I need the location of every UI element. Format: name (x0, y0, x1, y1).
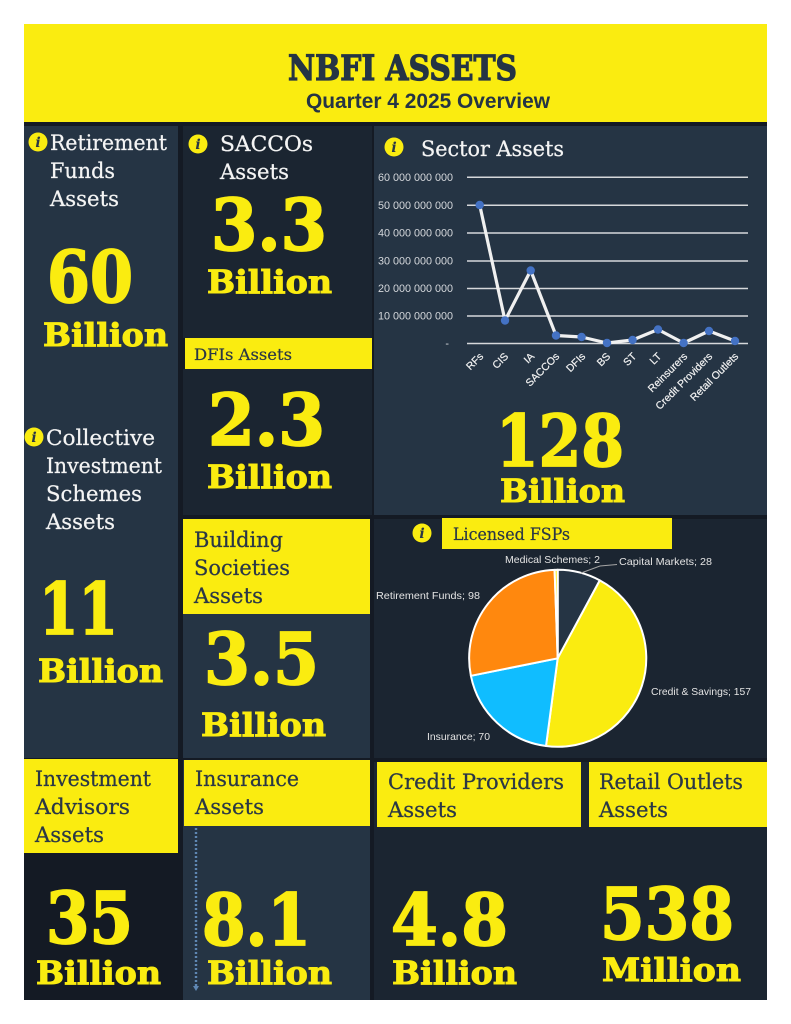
line chart: sector assets: 30 000 000 000 (378, 256, 453, 268)
heading: building societies assets (183, 519, 370, 614)
line chart: sector assets: Retail Outlets (688, 351, 741, 404)
value: 60 billion: 60 (47, 235, 133, 319)
value: 3.5 billion (201, 617, 326, 744)
value: 8.1 billion: Billion (207, 954, 332, 992)
heading: retirement funds assets (49, 131, 168, 211)
line chart: sector assets: LT (648, 350, 665, 367)
value: 2.3 billion: Billion (207, 458, 332, 496)
value: 60 billion: Billion (43, 316, 168, 354)
value: 11 billion: 11 (39, 567, 118, 651)
heading: insurance assets: Insurance (195, 767, 299, 791)
value: 538 million: Million (602, 951, 741, 989)
icon: info retirement funds: i (35, 135, 41, 151)
title: NBFI ASSETS (288, 48, 517, 89)
pie chart: licensed fsps: Capital Markets; 28 (619, 556, 712, 568)
heading: investment advisors assets: Assets (34, 823, 104, 847)
value: 35 billion (36, 876, 161, 992)
panel: saccos assets (183, 126, 372, 338)
value: 538 million (600, 872, 741, 989)
value: 11 billion: Billion (38, 652, 163, 690)
line chart: sector assets: BS (595, 351, 613, 369)
heading: insurance assets: Assets (194, 795, 264, 819)
line chart: sector assets (378, 172, 748, 412)
line chart: sector assets: 20 000 000 000 (378, 283, 453, 295)
value: 128 billion (496, 399, 625, 510)
icon: info collective investment (24, 428, 44, 446)
value: 11 billion (38, 567, 163, 690)
heading: investment advisors assets (24, 759, 178, 853)
value: 60 billion (43, 235, 168, 354)
value: 3.5 billion: Billion (201, 706, 326, 744)
icon: info saccos: i (195, 137, 201, 153)
heading: investment advisors assets: Investment (35, 767, 152, 791)
value: 4.8 billion: 4.8 (391, 878, 508, 962)
icon: info saccos (188, 134, 208, 154)
heading: retail outlets assets: Assets (598, 798, 668, 822)
header banner (24, 24, 767, 122)
value: 3.3 billion: 3.3 (211, 183, 327, 267)
heading: building societies assets: Assets (193, 584, 263, 608)
value: 35 billion: 35 (46, 876, 133, 960)
heading: retirement funds assets: Retirement (50, 131, 168, 155)
heading: licensed fsps: Licensed FSPs (453, 525, 570, 545)
value: 2.3 billion: 2.3 (208, 378, 325, 462)
heading: retail outlets assets (589, 762, 767, 827)
pie chart: licensed fsps: Medical Schemes; 2 (505, 554, 600, 566)
heading: collective investment schemes assets: Schemes (46, 482, 142, 506)
heading: sector assets: Sector Assets (421, 137, 564, 161)
panel: building societies assets (183, 519, 370, 758)
line chart: sector assets: RFs (464, 351, 486, 373)
panel: insurance assets (183, 760, 370, 1000)
line chart: sector assets: Credit Providers (653, 351, 715, 412)
line chart: sector assets: 60 000 000 000 (378, 172, 453, 184)
heading: insurance assets (184, 760, 370, 826)
line chart: sector assets: - (445, 338, 449, 350)
icon: info licensed fsps (412, 524, 432, 542)
value: 128 billion: 128 (496, 399, 624, 483)
pie chart: licensed fsps: Insurance; 70 (427, 731, 490, 743)
line chart: sector assets: IA (522, 351, 537, 366)
heading: retail outlets assets: Retail Outlets (599, 770, 743, 794)
heading: collective investment schemes assets: Investment (46, 454, 163, 478)
value: 35 billion: Billion (36, 954, 161, 992)
heading: collective investment schemes assets: Collective (46, 426, 155, 450)
value: 128 billion: Billion (500, 472, 625, 510)
heading: saccos assets (219, 132, 313, 184)
heading: retirement funds assets: Assets (49, 187, 119, 211)
heading: licensed fsps (442, 518, 672, 549)
value: 3.3 billion (207, 183, 332, 301)
heading: investment advisors assets: Advisors (34, 795, 130, 819)
heading: dfis assets (185, 338, 372, 369)
subtitle: Quarter 4 2025 Overview (306, 90, 551, 113)
panel: sector assets (374, 126, 767, 515)
heading: building societies assets: Societies (194, 556, 290, 580)
heading: retirement funds assets: Funds (50, 159, 115, 183)
value: 538 million: 538 (600, 872, 734, 956)
line chart: sector assets: 50 000 000 000 (378, 200, 453, 212)
heading: collective investment schemes assets (45, 426, 163, 534)
line chart: sector assets: DFIs (564, 351, 588, 375)
line chart: sector assets: 40 000 000 000 (378, 228, 453, 240)
heading: credit providers assets: Assets (387, 798, 457, 822)
panel: dfis assets (183, 338, 372, 515)
panel: investment advisors assets (24, 759, 178, 1000)
line chart: sector assets: Reinsurers (646, 351, 690, 395)
icon: info sector assets: i (391, 140, 397, 156)
panel: retirement funds and collective investment schemes (24, 126, 178, 758)
icon: info retirement funds (28, 132, 48, 152)
icon: info collective investment: i (31, 430, 37, 446)
value: 8.1 billion: 8.1 (202, 878, 311, 962)
pie chart: licensed fsps: Credit & Savings; 157 (651, 686, 751, 698)
line chart: sector assets: CIS (490, 351, 511, 372)
heading: saccos assets: Assets (219, 160, 289, 184)
line chart: sector assets: ST (621, 350, 640, 369)
heading: saccos assets: SACCOs (220, 132, 313, 156)
heading: credit providers assets (377, 762, 581, 827)
icon: info licensed fsps: i (419, 526, 425, 542)
value: 3.5 billion: 3.5 (204, 617, 319, 701)
heading: credit providers assets: Credit Providers (388, 770, 564, 794)
line chart: sector assets: 10 000 000 000 (378, 310, 453, 322)
line chart: sector assets: SACCOs (524, 351, 562, 389)
panel: credit providers and retail outlets (374, 762, 767, 1000)
icon: info sector assets (384, 138, 404, 156)
heading: collective investment schemes assets: Assets (45, 510, 115, 534)
value: 4.8 billion: Billion (392, 954, 517, 992)
arrow: dotted down (193, 828, 199, 991)
heading: dfis assets: DFIs Assets (194, 345, 292, 364)
panel: licensed fsps (374, 518, 767, 758)
pie chart: licensed fsps (376, 554, 751, 747)
value: 3.3 billion: Billion (207, 263, 332, 301)
pie chart: licensed fsps: Retirement Funds; 98 (376, 590, 480, 602)
heading: building societies assets: Building (194, 528, 283, 552)
